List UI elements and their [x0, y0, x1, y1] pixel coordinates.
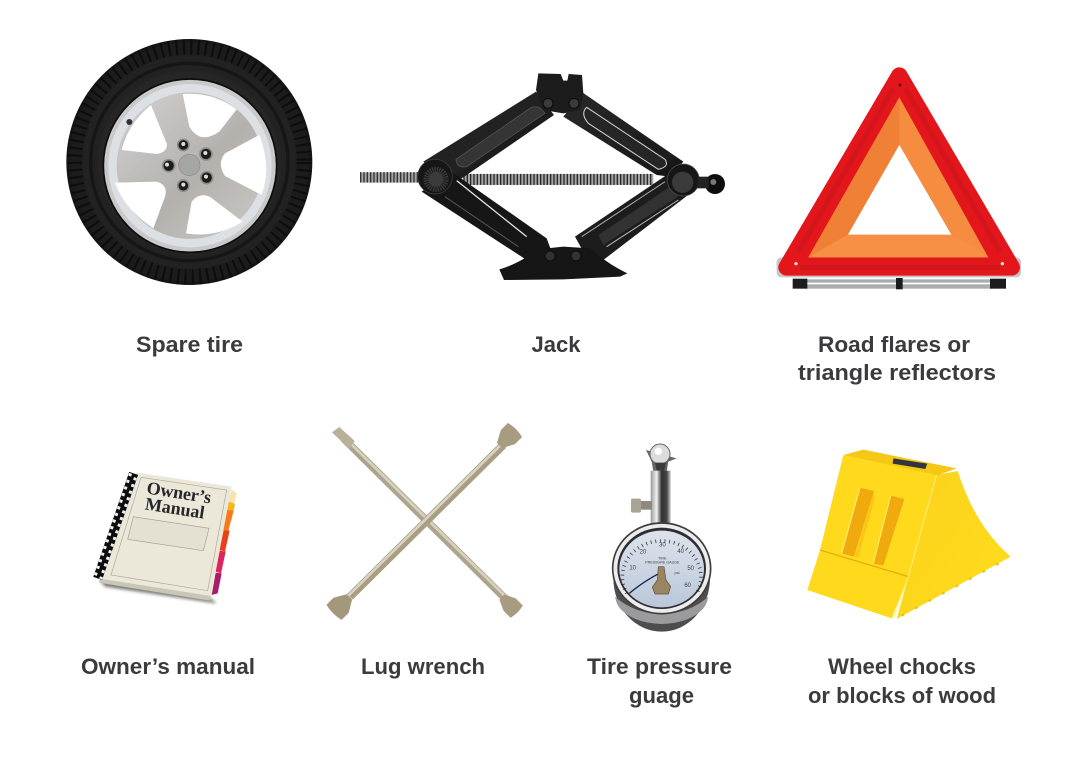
orange panel — [808, 97, 988, 257]
alloy rim — [103, 79, 277, 252]
label: tire pressure guage: guage — [629, 683, 694, 708]
darker reflector band — [798, 88, 1000, 267]
icon: wheel chock — [807, 450, 1011, 619]
label: wheel chocks: or blocks of wood — [808, 683, 996, 708]
label: wheel chocks: Wheel chocks — [828, 654, 976, 679]
lower left arm — [422, 171, 552, 260]
rim windows — [183, 94, 237, 137]
tabs — [212, 489, 237, 595]
side wall — [897, 471, 1011, 619]
left pivot — [418, 159, 452, 194]
icon: owner's manual — [95, 473, 237, 603]
tire tread — [74, 47, 304, 277]
bar with flat end — [332, 427, 524, 619]
base rivets — [545, 251, 581, 261]
dial numbers — [629, 543, 695, 589]
spiral binding — [95, 473, 137, 579]
tire rubber — [66, 39, 312, 285]
valve head — [646, 444, 677, 472]
triangle opening — [848, 145, 951, 235]
dark strip — [893, 458, 927, 469]
dial numbers: 50 — [687, 566, 695, 572]
needle — [629, 573, 659, 593]
label: road flares — [798, 332, 996, 385]
icon: warning triangle — [777, 76, 1021, 289]
dial numbers: 10 — [629, 565, 637, 571]
bottom teeth — [902, 558, 1008, 616]
label: spare tire: Spare tire — [136, 332, 243, 357]
slot one — [842, 488, 874, 558]
dial numbers: 30 — [659, 543, 666, 549]
cover — [100, 473, 232, 596]
right pivot — [667, 164, 699, 196]
upper right arm — [563, 93, 683, 177]
icon: tire pressure gauge — [613, 444, 711, 632]
lug holes — [163, 139, 213, 191]
label: tire pressure guage — [587, 654, 732, 708]
eye ring — [697, 174, 725, 194]
icon: owner's manual: Manual — [144, 494, 206, 523]
icon: spare tire — [66, 39, 312, 285]
dial numbers: 20 — [640, 549, 647, 555]
label: lug wrench: Lug wrench — [361, 654, 485, 679]
crossing bar — [326, 422, 523, 621]
gauge body — [613, 525, 710, 632]
dial numbers: 60 — [684, 583, 692, 589]
top surface — [843, 450, 957, 476]
base — [499, 247, 627, 280]
dial numbers: psi — [674, 570, 680, 575]
cover title: Owner’s — [145, 478, 213, 507]
label: wheel chocks — [808, 654, 996, 708]
label: tire pressure guage: Tire pressure — [587, 654, 732, 679]
dial ticks — [622, 541, 701, 593]
page edge — [99, 579, 211, 601]
threaded screw — [360, 172, 653, 185]
dial numbers: PRESSURE GAUGE — [645, 561, 680, 565]
front ledge — [820, 550, 908, 577]
valve — [126, 119, 132, 125]
slot two — [873, 496, 904, 566]
needle mount — [652, 567, 671, 594]
bracket rivets — [543, 98, 579, 108]
silver base plate — [777, 257, 1021, 277]
front face — [807, 455, 937, 618]
hub cap — [179, 154, 200, 176]
icon: lug wrench — [326, 422, 524, 621]
label: owner's manual: Owner’s manual — [81, 654, 255, 679]
cover border — [111, 477, 227, 591]
icon: jack — [360, 73, 725, 280]
label: jack: Jack — [532, 332, 581, 357]
dial numbers: 40 — [677, 549, 685, 555]
label box — [128, 517, 209, 551]
label: road flares: Road flares or — [818, 332, 970, 357]
dial numbers: TIRE — [658, 556, 667, 560]
chrome stem — [651, 471, 671, 526]
label: road flares: triangle reflectors — [798, 360, 996, 385]
upper left arm — [423, 92, 554, 188]
book shadow — [100, 581, 217, 603]
chrome bezel — [613, 523, 711, 614]
side button — [631, 499, 652, 513]
dial face — [619, 531, 704, 607]
folding stand — [793, 278, 1006, 289]
top bracket — [536, 73, 583, 113]
reflector screws — [794, 262, 1004, 265]
red reflector frame — [787, 76, 1012, 267]
lower right arm — [575, 172, 697, 260]
